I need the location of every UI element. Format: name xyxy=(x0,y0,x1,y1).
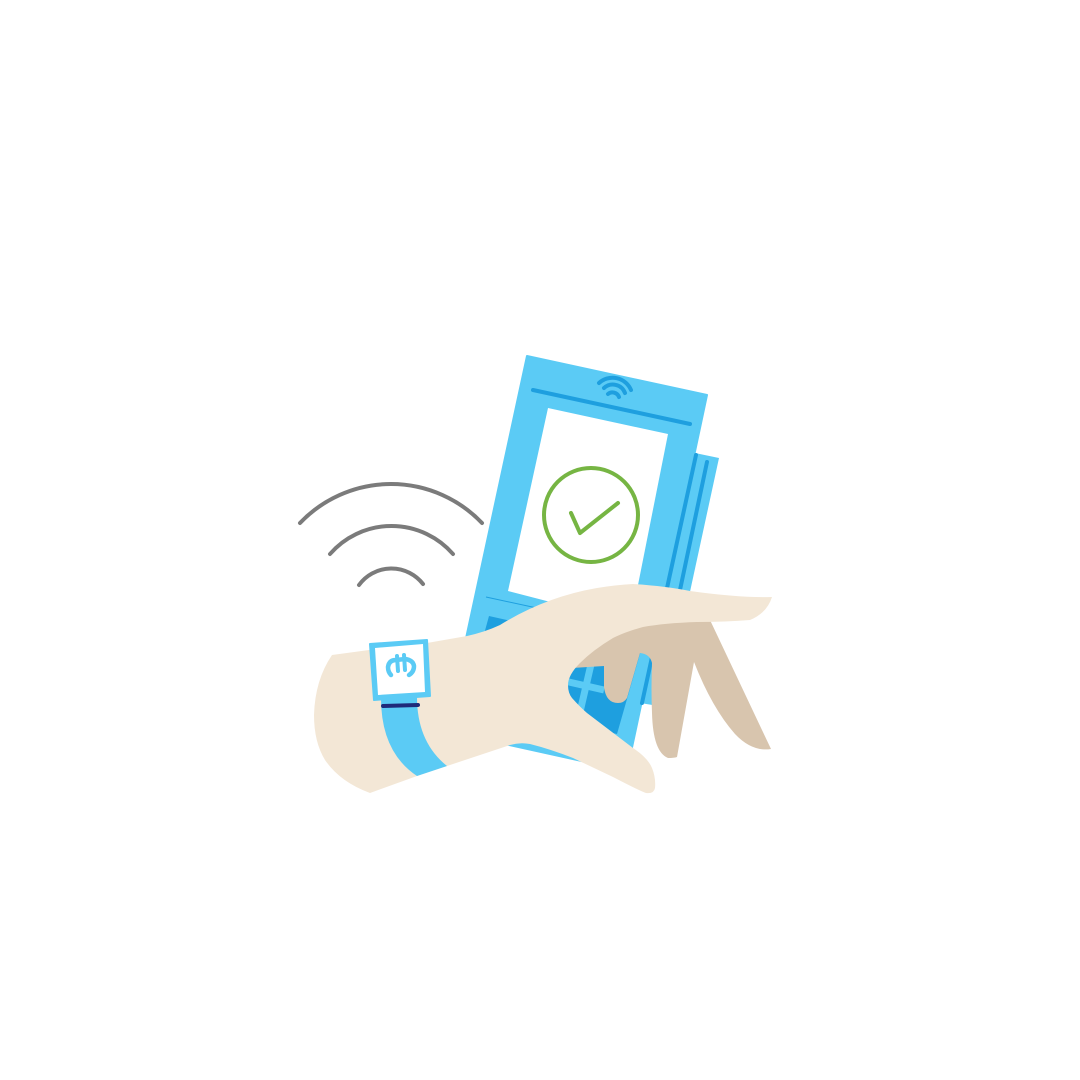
hand xyxy=(314,584,772,793)
icon: currency symbol xyxy=(388,655,414,675)
watch face xyxy=(375,644,425,695)
thin divider line xyxy=(486,597,560,613)
icon: wireless signal waves xyxy=(300,484,482,585)
keypad xyxy=(466,616,641,734)
strap xyxy=(381,697,447,776)
payment card behind terminal xyxy=(640,453,719,707)
icon: terminal wifi xyxy=(599,378,631,397)
card stripes xyxy=(642,455,707,703)
terminal screen xyxy=(508,408,668,620)
terminal top bar xyxy=(533,390,690,424)
icon: approved check mark xyxy=(544,468,638,562)
terminal body xyxy=(446,356,707,771)
payment terminal xyxy=(446,356,707,771)
wristband xyxy=(370,640,447,776)
watch frame xyxy=(370,640,430,700)
strap clasp xyxy=(383,705,418,706)
back fingers xyxy=(572,620,771,758)
